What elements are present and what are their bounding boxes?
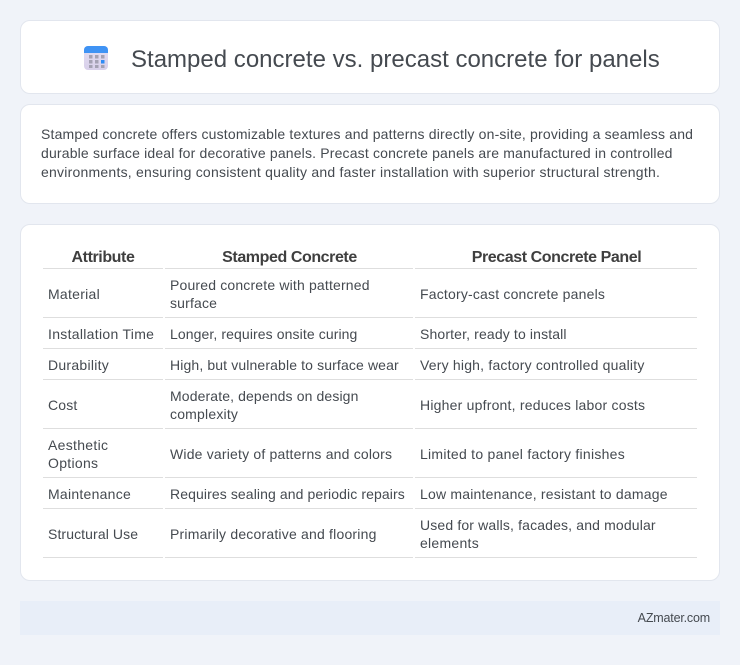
row: Cost: complexity [170,406,238,422]
row: Material: surface [170,295,217,311]
row: Cost: Cost [48,397,77,413]
panel: comparison table [20,224,720,581]
row: Durability [48,357,645,373]
table header [72,249,641,266]
panel: title card [20,20,720,94]
row: Installation Time: Longer, requires onsite curing [170,326,357,342]
row: Durability: Very high, factory controlled quality [420,357,645,373]
row: Aesthetic Options: Options [48,455,98,471]
row: Structural Use: Structural Use [48,526,138,542]
row: Maintenance: Requires sealing and periodic repairs [170,486,405,502]
summary text [41,126,693,180]
row: Material: Factory-cast concrete panels [420,286,605,302]
row: Material: Poured concrete with patterned [170,277,370,293]
row: Cost [48,388,645,422]
row: Aesthetic Options [48,437,625,471]
icon: calendar [84,46,108,70]
row: Maintenance [48,486,668,502]
row: Material: Material [48,286,100,302]
row: Durability: High, but vulnerable to surface wear [170,357,399,373]
summary text: durable surface ideal for decorative panels. Precast concrete panels are manufactured in controlled [41,145,673,161]
footer bar [20,601,720,635]
row: Cost: Moderate, depends on design [170,388,358,404]
row: Structural Use: Used for walls, facades, and modular [420,517,656,533]
row: Structural Use: elements [420,535,479,551]
table header: Stamped Concrete [222,249,357,266]
row: Structural Use [48,517,656,551]
table header: Precast Concrete Panel [472,249,641,266]
row: Maintenance: Low maintenance, resistant to damage [420,486,668,502]
panel: summary [20,104,720,204]
row: Installation Time: Installation Time [48,326,154,342]
row: Cost: Higher upfront, reduces labor costs [420,397,645,413]
table header: Attribute [72,249,134,266]
summary text: environments, ensuring consistent quality and faster installation with superior structural strength. [41,164,660,180]
row: Installation Time: Shorter, ready to install [420,326,567,342]
row: Aesthetic Options: Limited to panel factory finishes [420,446,625,462]
title: Stamped concrete vs. precast concrete for panels [131,46,660,73]
row: Aesthetic Options: Aesthetic [48,437,108,453]
row: Maintenance: Maintenance [48,486,131,502]
row: Material [48,277,605,311]
row: Structural Use: Primarily decorative and flooring [170,526,377,542]
row: Aesthetic Options: Wide variety of patterns and colors [170,446,392,462]
footer text: AZmater.com [638,611,710,625]
row: Durability: Durability [48,357,109,373]
summary text: Stamped concrete offers customizable textures and patterns directly on-site, providing a seamless and [41,126,693,142]
row: Installation Time [48,326,567,342]
